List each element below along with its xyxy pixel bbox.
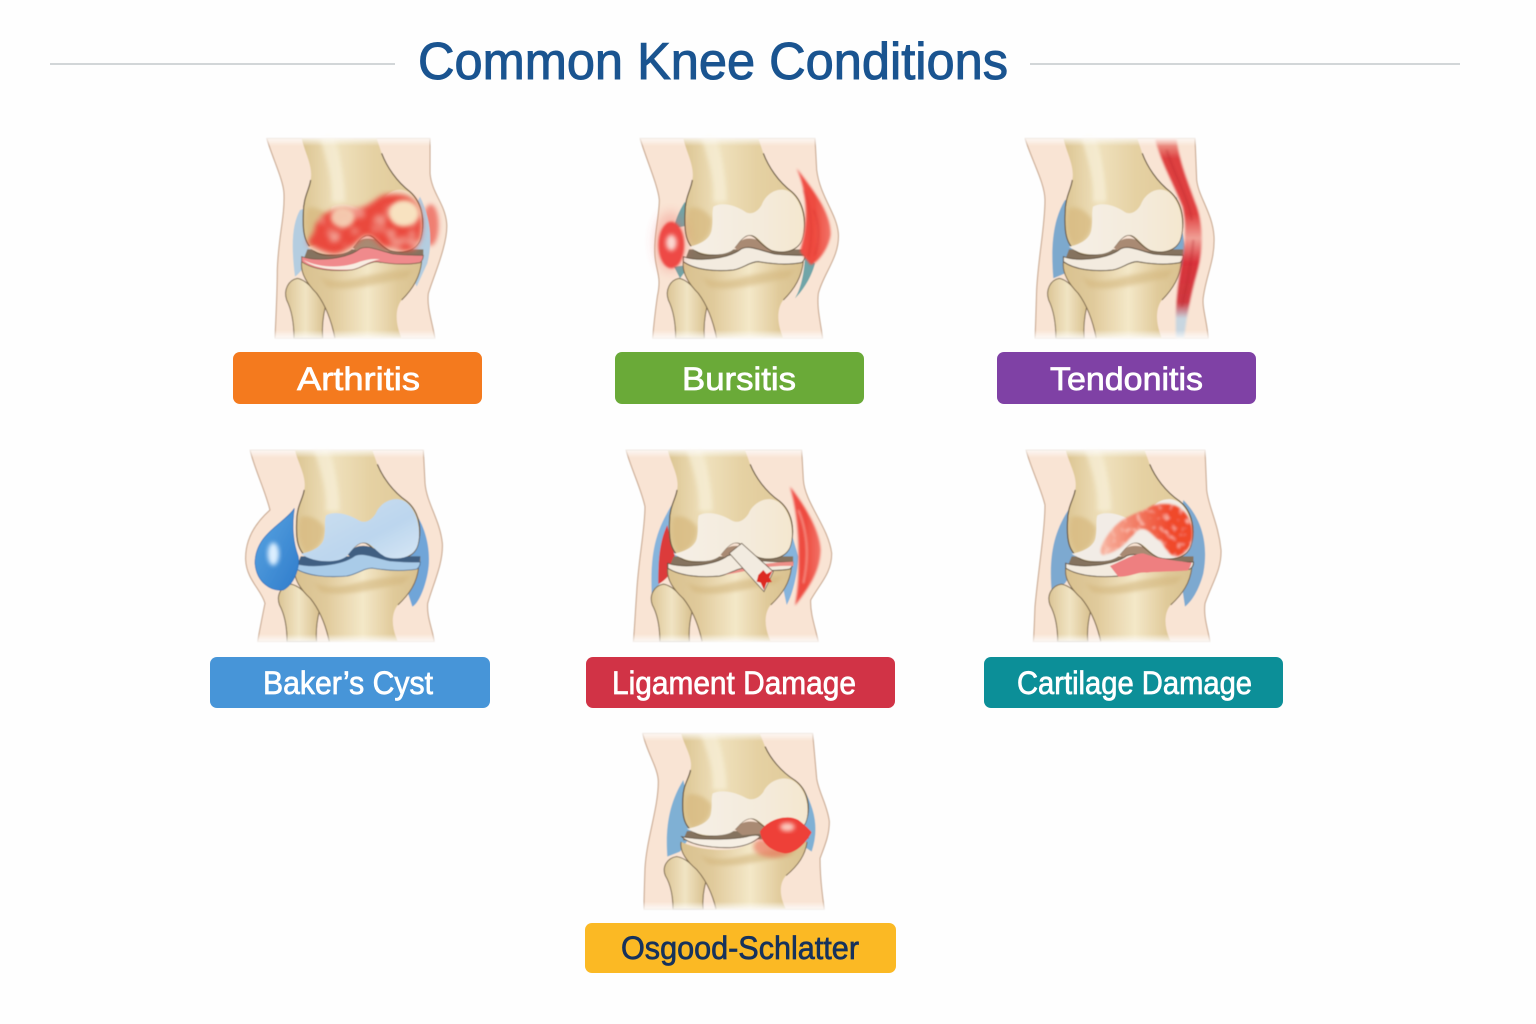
illustration: Osgood-Schlatter knee	[623, 731, 843, 911]
label: Baker's Cyst	[210, 657, 490, 708]
label: Baker's Cyst: Baker’s Cyst	[263, 665, 433, 701]
label: Bursitis: Bursitis	[682, 361, 796, 397]
label: Osgood-Schlatter	[585, 923, 896, 973]
condition: Baker's Cyst	[210, 448, 490, 708]
illustration: torn ligament knee	[617, 448, 837, 643]
title rule: left	[50, 63, 395, 65]
label: Bursitis	[615, 352, 864, 404]
label: Ligament Damage: Ligament Damage	[612, 665, 856, 701]
label: Osgood-Schlatter: Osgood-Schlatter	[621, 930, 859, 966]
label: Arthritis: Arthritis	[297, 361, 420, 397]
illustration: Baker's cyst knee	[238, 448, 445, 643]
condition: Tendonitis	[997, 136, 1256, 404]
label: Cartilage Damage	[984, 657, 1283, 708]
label: Tendonitis: Tendonitis	[1050, 361, 1203, 397]
condition: Ligament Damage	[586, 448, 895, 708]
condition: Osgood-Schlatter	[585, 731, 896, 973]
illustration: tendonitis knee	[1010, 136, 1223, 340]
title rule: right	[1030, 63, 1460, 65]
label: Cartilage Damage: Cartilage Damage	[1017, 665, 1252, 701]
label: Ligament Damage	[586, 657, 895, 708]
label: Arthritis	[233, 352, 482, 404]
title: Common Knee Conditions	[418, 33, 1008, 91]
illustration: arthritic knee	[253, 136, 460, 340]
condition: Bursitis	[615, 136, 864, 404]
condition: Cartilage Damage	[984, 448, 1283, 708]
condition: Arthritis	[233, 136, 482, 404]
illustration: bursitis knee	[633, 136, 840, 340]
illustration: damaged cartilage knee	[1017, 448, 1237, 643]
label: Tendonitis	[997, 352, 1256, 404]
